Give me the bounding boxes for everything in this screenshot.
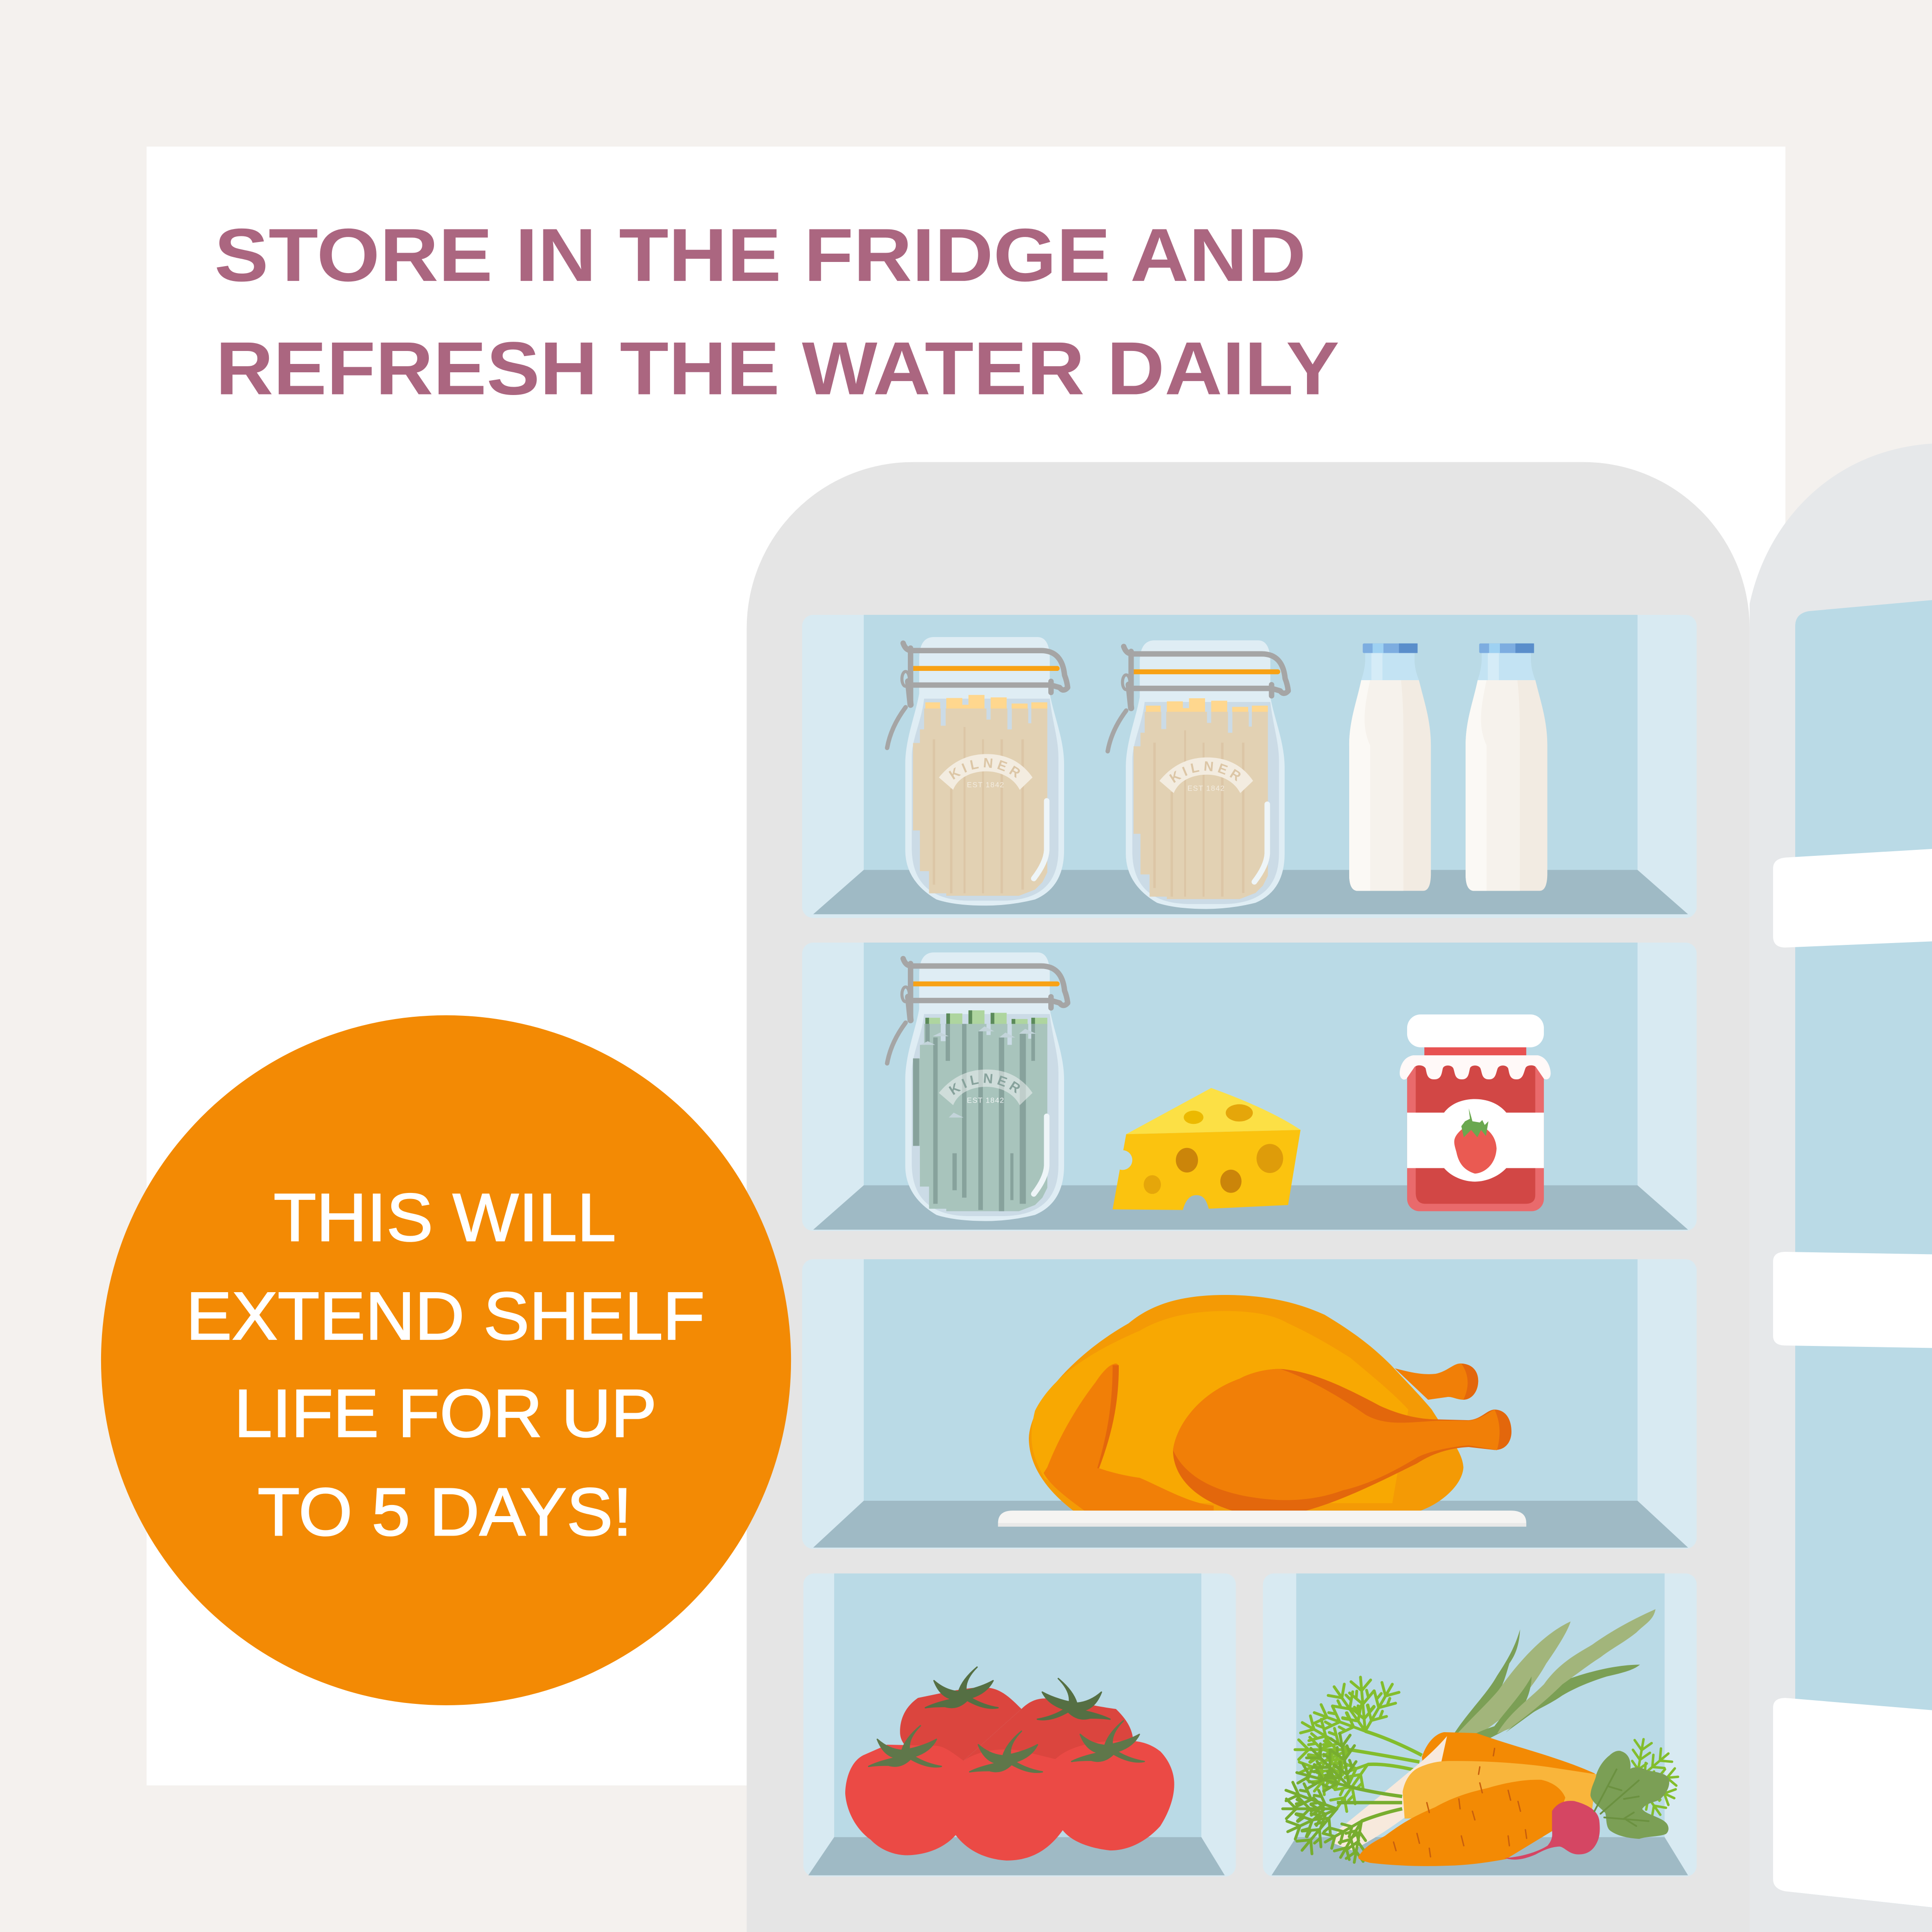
title: REFRESH THE WATER DAILY [216, 326, 1339, 410]
panel: right drawer [1263, 1574, 1696, 1876]
jar: tan sticks left: EST 1842 [967, 781, 1005, 789]
bottle: milk right [1466, 644, 1547, 891]
carrot: back [1422, 1732, 1595, 1811]
panel: top shelf [802, 615, 1696, 918]
radish [1505, 1801, 1600, 1860]
title: STORE IN THE FRIDGE AND [214, 213, 1306, 297]
title [214, 213, 1339, 410]
radish leaves [1590, 1751, 1669, 1839]
jar: tan sticks right [1108, 640, 1288, 909]
bottle: milk left [1349, 644, 1431, 891]
cheese wedge [1113, 1088, 1301, 1210]
strawberry jam jar [1400, 1014, 1550, 1211]
callout: orange circle: TO 5 DAYS! [257, 1474, 632, 1549]
panel: second shelf [802, 943, 1696, 1231]
carrot markings [1394, 1748, 1527, 1857]
vegetables [1282, 1609, 1679, 1866]
jar: green sticks: KILNER [947, 1071, 1026, 1098]
jar: green sticks [887, 952, 1068, 1221]
parsnip [1334, 1736, 1447, 1850]
callout: orange circle: LIFE FOR UP [234, 1376, 657, 1451]
serving plate [998, 1511, 1526, 1527]
fern: right carrot top [1628, 1738, 1679, 1820]
jar: green sticks: EST 1842 [967, 1097, 1005, 1104]
jar: tan sticks left [887, 637, 1068, 905]
callout: orange circle [101, 1015, 791, 1705]
callout: orange circle: EXTEND SHELF [186, 1278, 705, 1354]
panel: white card [147, 147, 1785, 1785]
tomatoes [845, 1667, 1174, 1861]
jar: tan sticks right: EST 1842 [1187, 784, 1225, 792]
carrot: yellow [1403, 1761, 1596, 1819]
carrot: front [1358, 1780, 1565, 1866]
fern: upper carrot top [1295, 1676, 1422, 1816]
leek leaves [1444, 1609, 1656, 1760]
callout: orange circle: THIS WILL [274, 1180, 616, 1255]
panel: third shelf [802, 1259, 1696, 1549]
jar: tan sticks right: KILNER [1167, 759, 1246, 786]
fridge body [746, 462, 1750, 1932]
radish leaf veins [1594, 1769, 1649, 1826]
roast chicken [1029, 1295, 1511, 1511]
fern: lower carrot top [1282, 1731, 1402, 1864]
open fridge door [1750, 444, 1932, 1932]
panel: left drawer [803, 1574, 1236, 1876]
jar: tan sticks left: KILNER [947, 756, 1026, 783]
